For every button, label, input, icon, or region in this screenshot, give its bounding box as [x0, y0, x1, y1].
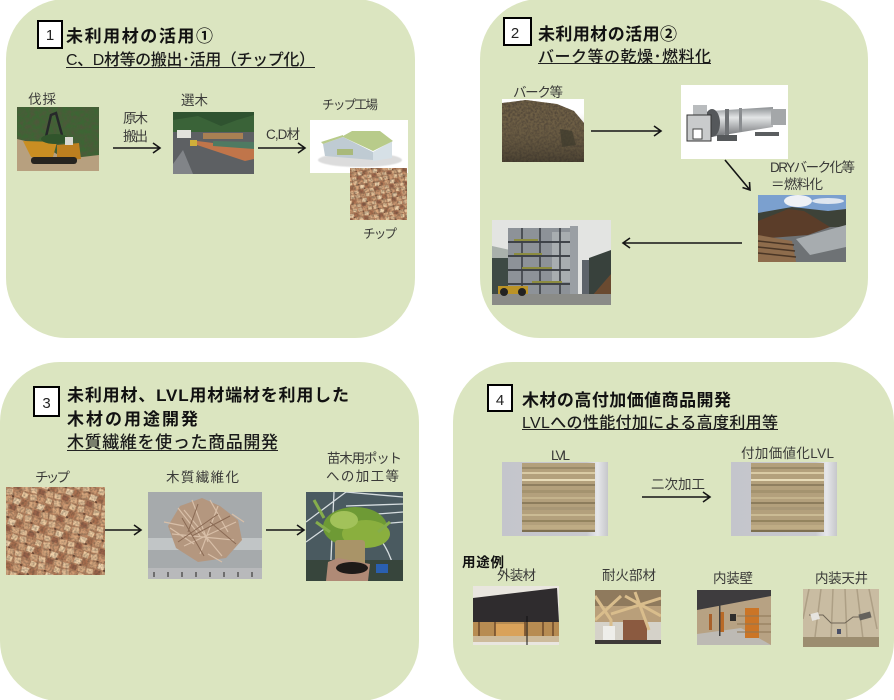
arrow: fibre to pot [266, 525, 304, 535]
label: LVL: LVL [551, 448, 570, 463]
label: dry bark as fuel: DRYバーク化等 [770, 159, 855, 175]
label: dry bark as fuel: ＝燃料化 [771, 176, 824, 192]
panel 3 background [0, 362, 419, 700]
photo: biomass plant [492, 220, 611, 305]
label: log sorting: 選木 [181, 93, 208, 108]
label: wood fibre: 木質繊維化 [166, 470, 240, 485]
arrow: dryer to dry bark [725, 160, 750, 190]
label: secondary processing: 二次加工 [651, 477, 705, 492]
photo: dry bark yard [758, 195, 846, 262]
label: usage examples: 用途例 [462, 554, 504, 570]
photo: value-added LVL board [731, 462, 837, 536]
panel 1 subheading: C、D材等の搬出･活用（チップ化） [66, 51, 315, 69]
panel 3 subheading: 木質繊維を使った商品開発 [67, 433, 278, 452]
panel 2 background [480, 0, 868, 338]
panel 1 background [6, 0, 415, 338]
photo: LVL board [502, 462, 608, 536]
panel 2 heading: 未利用材の活用② [538, 25, 677, 44]
label: log hauling [123, 111, 148, 144]
label: C,D grade timber: C,D材 [266, 127, 300, 142]
panel 4 subheading: LVLへの性能付加による高度利用等 [522, 414, 778, 432]
panel 3 heading: 未利用材、LVL用材端材を利用した [67, 386, 349, 405]
arrow: C,D grade timber [258, 143, 305, 153]
panel 4 number: 4 [496, 392, 504, 409]
photo: felling machine [17, 107, 99, 171]
label: chip factory: チップ工場 [322, 98, 378, 112]
panel 3 heading [67, 386, 349, 429]
label: bark: バーク等 [513, 84, 563, 100]
panel 3 heading: 木材の用途開発 [67, 410, 198, 429]
panel 4 heading: 木材の高付加価値商品開発 [522, 390, 731, 410]
panel 2 number: 2 [511, 25, 519, 42]
arrow: bark to dryer [591, 126, 661, 136]
panel 2 number [504, 18, 531, 45]
panel 1 number [38, 21, 62, 48]
photo: seedling pot [306, 492, 403, 581]
panel 2 subheading: バーク等の乾燥･燃料化 [538, 48, 711, 66]
label: seedling pots: への加工等 [326, 468, 399, 484]
panel 1 heading: 未利用材の活用① [66, 27, 213, 46]
label: chips: チップ [35, 470, 70, 485]
panel 1: unused wood chips [6, 0, 415, 338]
panel 3: fibre product development [0, 362, 419, 700]
panel 3 number [34, 387, 59, 416]
photo: log sorting yard [173, 112, 254, 174]
photo: wood chips [6, 487, 105, 575]
photo: fire-resistant structure [595, 590, 661, 644]
label: interior wall: 内装壁 [713, 571, 753, 586]
panel 3 number: 3 [42, 395, 51, 412]
panel 4 background [453, 362, 894, 700]
arrow: log hauling [113, 143, 160, 153]
label: fire-resistant material: 耐火部材 [602, 568, 656, 583]
arrow: secondary processing [642, 492, 710, 502]
panel 4 number [488, 385, 512, 411]
label: seedling pots: 苗木用ポット [327, 451, 402, 466]
photo: wood fibre [148, 492, 262, 579]
label: value-added LVL: 付加価値化LVL [741, 446, 834, 461]
photo: exterior [473, 586, 559, 645]
label: seedling pots [326, 451, 402, 484]
label: log hauling: 搬出 [123, 129, 148, 144]
label: chips: チップ [363, 227, 397, 241]
label: interior ceiling: 内装天井 [815, 571, 868, 586]
label: dry bark as fuel [770, 159, 855, 192]
illustration: chip factory [310, 120, 408, 173]
label: exterior material: 外装材 [497, 568, 536, 583]
label: log hauling: 原木 [123, 111, 148, 126]
photo: rotary dryer [681, 85, 788, 159]
photo: interior ceiling [803, 589, 879, 647]
arrow: fuel to plant [623, 238, 742, 248]
photo: bark pile [502, 99, 584, 162]
photo: wood chips [350, 168, 407, 220]
photo: interior wall [697, 590, 771, 645]
panel 1 number: 1 [46, 27, 54, 44]
panel 4: high value-added products [453, 362, 894, 700]
arrow: chips to fibre [105, 525, 141, 535]
label: felling: 伐採 [28, 92, 56, 107]
panel 2: bark drying and fuel use [480, 0, 868, 338]
